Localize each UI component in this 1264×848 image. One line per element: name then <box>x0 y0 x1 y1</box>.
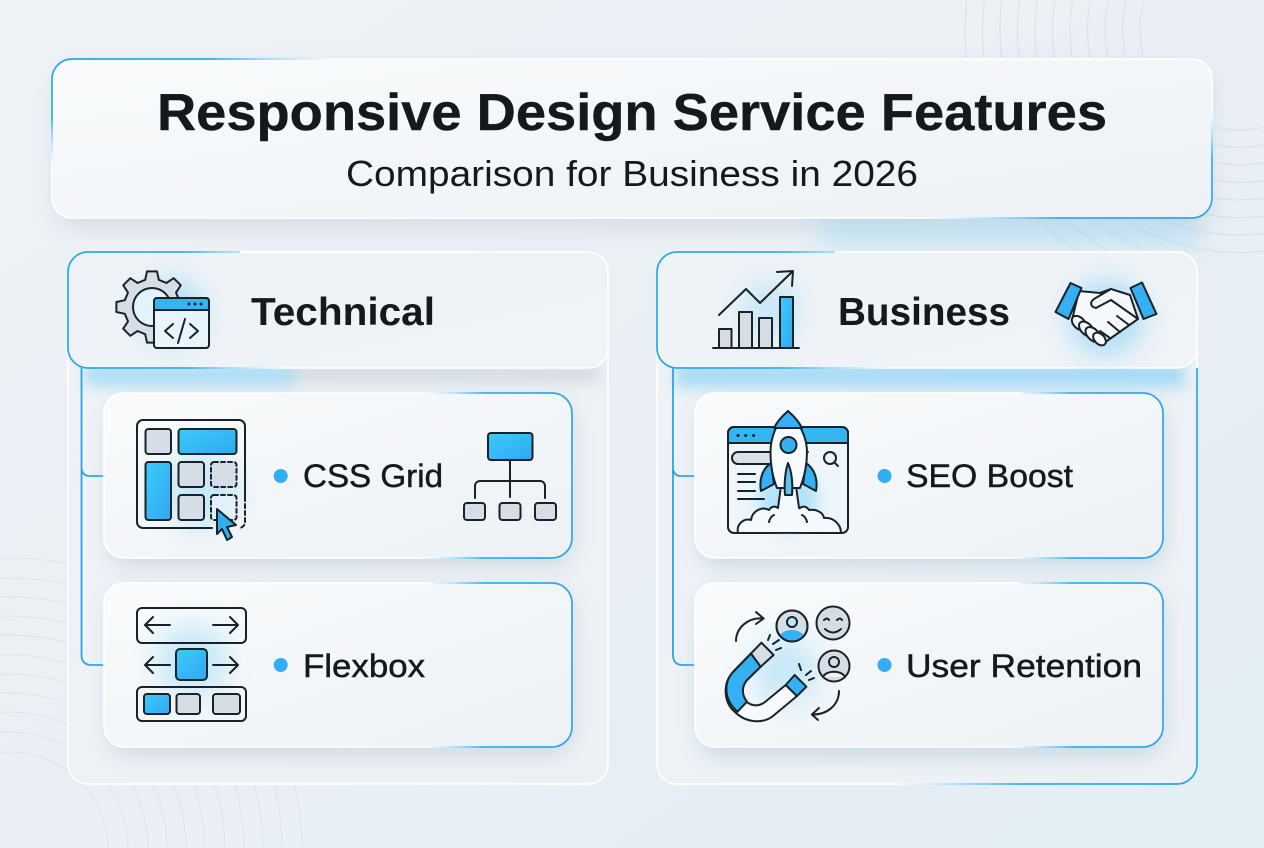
icon: rocket launching from browser window <box>728 411 848 533</box>
label: seo boost: SEO Boost <box>906 458 1073 494</box>
header: business <box>657 252 1197 368</box>
label: user retention: User Retention <box>906 648 1142 684</box>
bullet <box>274 469 288 483</box>
icon: growth chart <box>713 271 799 348</box>
card: seo boost <box>695 393 1163 566</box>
bullet <box>878 658 892 672</box>
bullet <box>274 658 288 672</box>
card: user retention <box>695 583 1163 756</box>
icon: flexbox rows and arrows <box>137 608 246 721</box>
heading: business: Business <box>838 291 1010 334</box>
panel: technical <box>68 252 608 784</box>
card: flexbox <box>104 583 572 755</box>
label: flexbox: Flexbox <box>303 648 425 684</box>
subtitle: Comparison for Business in 2026 <box>346 153 918 194</box>
panel: business <box>657 252 1197 784</box>
title card <box>52 59 1212 246</box>
title: Responsive Design Service Features <box>157 84 1107 142</box>
icon: grid layout with cursor <box>137 420 245 540</box>
bullet <box>878 469 892 483</box>
heading: technical: Technical <box>251 291 435 334</box>
icon: handshake <box>1056 282 1156 348</box>
connector: business tree <box>673 368 696 665</box>
icon: gear and code window <box>116 271 209 348</box>
icon: magnet attracting users <box>726 606 850 721</box>
header: technical <box>68 252 608 368</box>
icon: hierarchy <box>464 433 556 520</box>
card: css grid <box>104 393 572 566</box>
label: css grid: CSS Grid <box>303 458 443 494</box>
connector: technical tree <box>82 368 106 665</box>
